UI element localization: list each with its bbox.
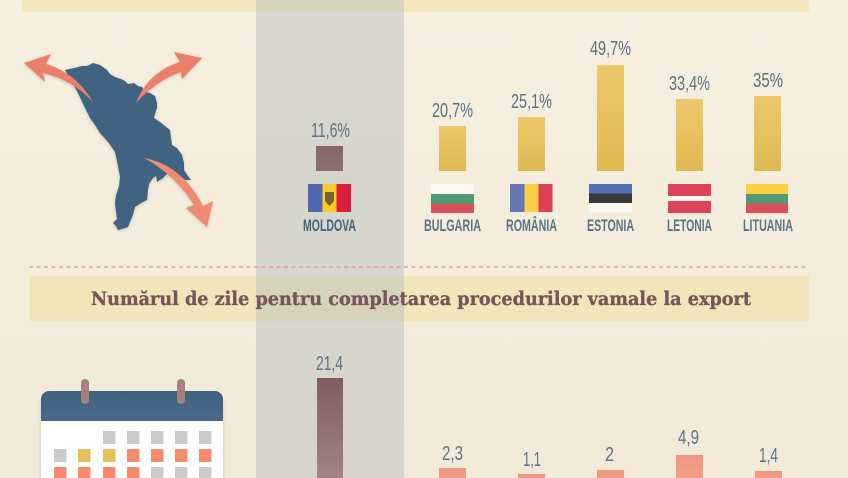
- country labels: MOLDOVA: [303, 216, 356, 235]
- second heading strip: [30, 276, 809, 321]
- Moldova bar 21,4: 21,4: [316, 353, 343, 375]
- flag: Moldova: [308, 184, 351, 212]
- Bulgaria bar 2,3: [439, 443, 466, 478]
- calendar page: [41, 400, 223, 478]
- country labels: [303, 216, 793, 235]
- arrow: south-east: [144, 158, 213, 227]
- arrow: north-west: [24, 54, 93, 102]
- Lithuania bar 35%: 35%: [753, 70, 783, 92]
- Moldova bar 11,6%: [311, 120, 350, 171]
- Estonia bar 2: 2: [605, 444, 614, 466]
- Moldova highlight column: [256, 0, 404, 478]
- flag: Estonia: [589, 184, 632, 212]
- Moldova bar 21,4: [316, 353, 343, 478]
- Lithuania bar 1,4: 1,4: [759, 445, 778, 467]
- top heading strip: [22, 0, 809, 12]
- country labels: LETONIA: [667, 216, 712, 235]
- flag: Romania: [510, 184, 552, 212]
- Latvia bar 33,4%: [669, 73, 710, 171]
- bar chart: days for export procedures: [316, 353, 782, 478]
- arrow: north-east: [136, 52, 202, 103]
- country labels: ESTONIA: [587, 216, 634, 235]
- Moldova bar 11,6%: 11,6%: [311, 120, 350, 142]
- flag: Bulgaria: [431, 184, 474, 213]
- Lithuania bar 1,4: [755, 445, 782, 478]
- heading: export customs days: Numărul de zile pentru completarea procedurilor vamale la export: [91, 288, 751, 310]
- Estonia bar 2: [597, 444, 624, 478]
- flag: Lithuania: [746, 184, 788, 213]
- country labels: BULGARIA: [424, 216, 481, 235]
- calendar header: [41, 391, 223, 421]
- map of Moldova with export arrows: [24, 52, 213, 230]
- Estonia bar 49,7%: 49,7%: [590, 38, 631, 60]
- Latvia bar 4,9: 4,9: [678, 427, 699, 449]
- Latvia bar 4,9: [676, 427, 703, 478]
- country labels: ROMÂNIA: [506, 216, 557, 235]
- calendar rings: [81, 379, 185, 404]
- Estonia bar 49,7%: [590, 38, 631, 171]
- Romania bar 25,1%: [511, 91, 552, 171]
- Romania bar 1,1: [518, 449, 545, 478]
- map silhouette: [65, 63, 191, 230]
- Romania bar 25,1%: 25,1%: [511, 91, 552, 113]
- Romania bar 1,1: 1,1: [523, 449, 541, 471]
- bar chart: export share: [311, 38, 783, 171]
- Bulgaria bar 20,7%: 20,7%: [432, 100, 473, 122]
- flag: Latvia: [668, 184, 711, 213]
- country labels: LITUANIA: [743, 216, 793, 235]
- Bulgaria bar 20,7%: [432, 100, 473, 171]
- Bulgaria bar 2,3: 2,3: [442, 443, 463, 465]
- Latvia bar 33,4%: 33,4%: [669, 73, 710, 95]
- calendar icon: [41, 379, 223, 478]
- calendar days: [54, 431, 212, 478]
- Lithuania bar 35%: [753, 70, 783, 171]
